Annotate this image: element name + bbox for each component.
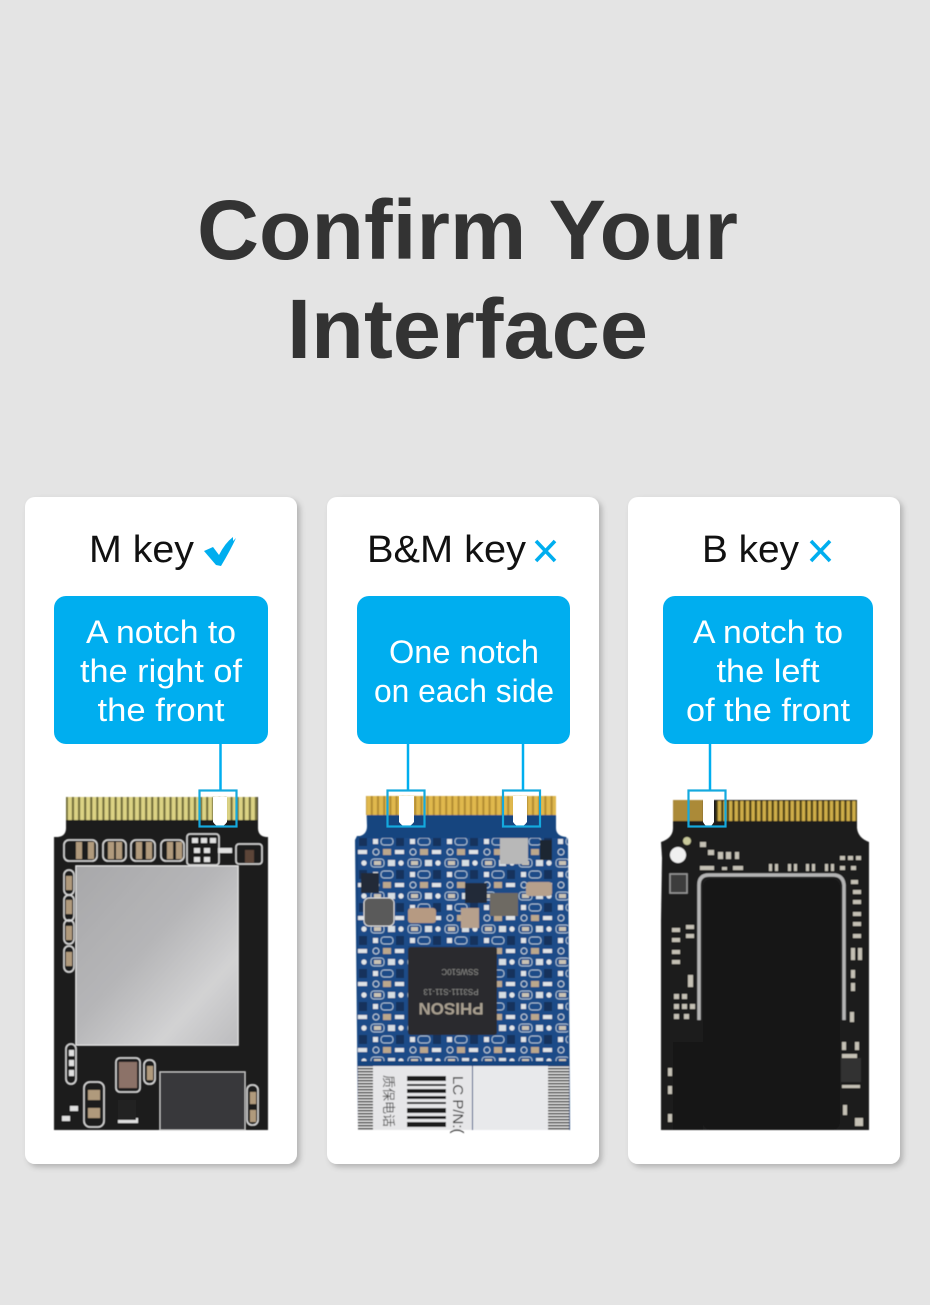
- icon: cross mark: [811, 541, 830, 561]
- card background: [327, 497, 599, 1164]
- barcode: [407, 1076, 446, 1127]
- SSD board: B&M key: 质保电话: [381, 1075, 396, 1127]
- title: Confirm Your: [197, 183, 738, 277]
- heading: B key: B key: [702, 529, 799, 571]
- callout: B key description: the left: [716, 653, 820, 689]
- notch indicator: M key: [200, 744, 236, 827]
- SSD board: B key: [661, 800, 869, 1130]
- title: [197, 183, 738, 376]
- label text: LC P/N:(: [449, 1076, 466, 1134]
- panel: B&M key: [327, 497, 599, 1164]
- icon: cross mark: [536, 541, 555, 561]
- callout: M key description: [54, 596, 268, 744]
- callout: B key description: of the front: [686, 692, 850, 728]
- callout: M key description: A notch to: [86, 614, 236, 650]
- SSD board: B&M key: SSW510C: [441, 967, 479, 976]
- callout: B key description: [663, 596, 873, 744]
- SSD board: B&M key: [355, 796, 570, 1134]
- small components: [668, 842, 863, 1126]
- chip label: PHISON: [418, 999, 484, 1018]
- callout: B&M key description: One notch: [389, 634, 539, 670]
- panel: B key: [628, 497, 900, 1164]
- SSD board: B&M key: PS3111-S11-13: [423, 987, 479, 996]
- callout: B&M key description: on each side: [374, 673, 554, 709]
- SSD board: M key: [54, 797, 268, 1130]
- icon: check mark: [204, 537, 236, 566]
- notch indicator: B key: [688, 744, 726, 827]
- notch indicators: B&M key: [388, 744, 540, 827]
- heading: M key: M key: [89, 529, 194, 571]
- card background: [628, 497, 900, 1164]
- callout: B key description: A notch to: [693, 614, 843, 650]
- card background: [25, 497, 297, 1164]
- callout: M key description: the front: [98, 692, 224, 728]
- heading: B&M key: B&M key: [367, 529, 526, 571]
- callout: M key description: the right of: [80, 653, 243, 689]
- callout: B&M key description: [357, 596, 570, 744]
- panel: M key: [25, 497, 297, 1164]
- title: Interface: [287, 282, 648, 376]
